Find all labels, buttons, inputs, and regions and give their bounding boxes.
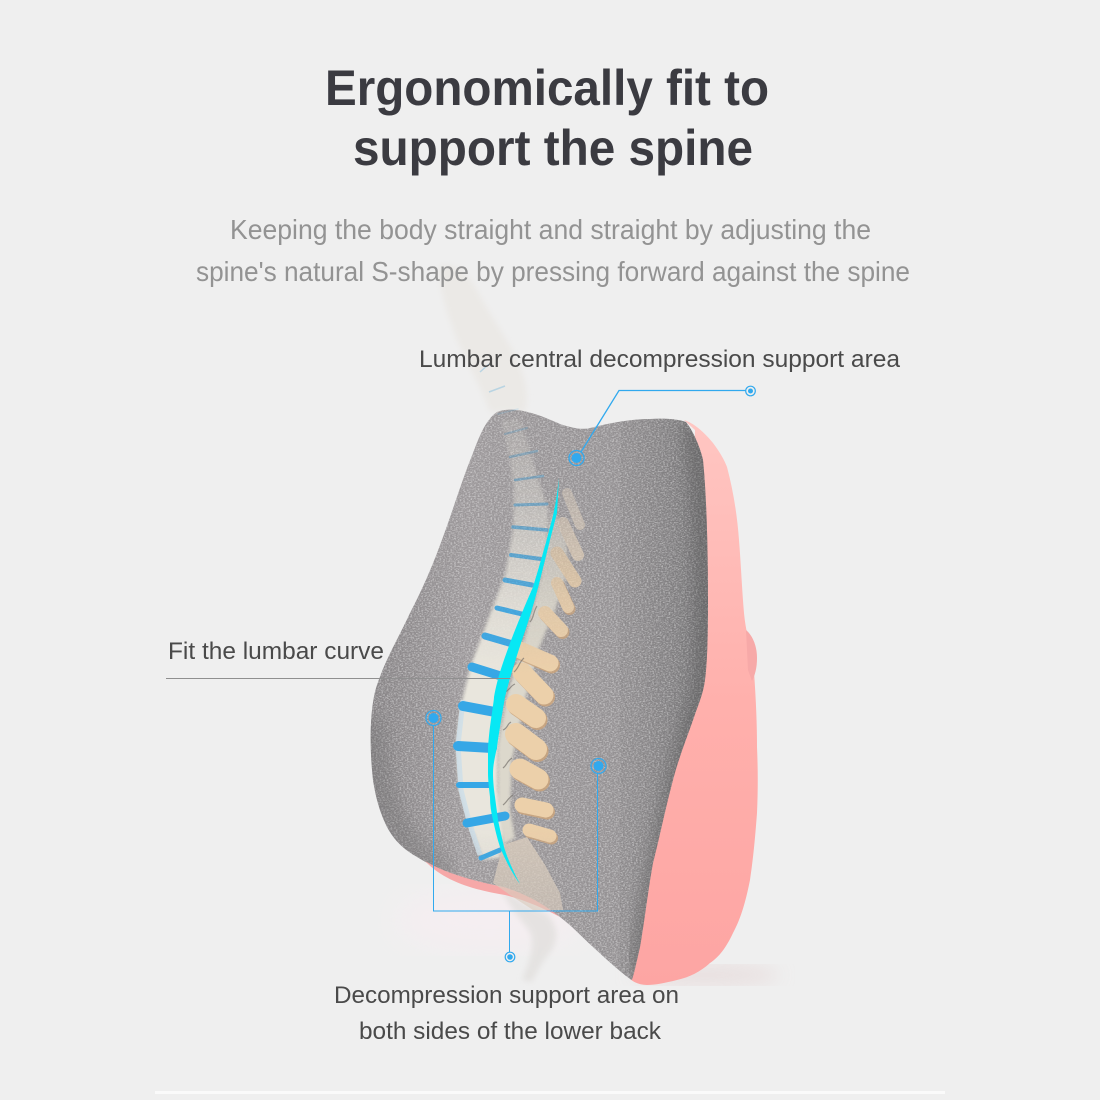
subtitle: Keeping the body straight and straight by adjusting the <box>230 214 871 245</box>
marker: right side support <box>591 758 606 774</box>
spine illustration <box>456 409 580 910</box>
marker: central support <box>569 450 584 466</box>
facet joint shadows <box>503 606 537 805</box>
vertebral bodies <box>456 418 548 860</box>
soft floor shadow <box>395 890 780 984</box>
lumbar cushion <box>360 400 758 990</box>
inner bone mass right of curve <box>498 510 568 845</box>
label: decompression support: both sides of the lower back <box>359 1018 662 1045</box>
vertebra shading <box>458 700 480 855</box>
pink edge under cushion <box>425 861 560 917</box>
cushion grey front <box>360 400 720 990</box>
spinous process shadow layer <box>518 585 570 838</box>
callout: central support connector <box>569 386 755 466</box>
callout line: fit the lumbar curve <box>166 678 510 680</box>
cyan spinal curve <box>488 478 559 884</box>
infographic canvas <box>155 68 945 1094</box>
intervertebral discs <box>458 409 547 858</box>
faint upper spine <box>439 265 527 412</box>
title <box>325 60 769 176</box>
title: support the spine <box>353 120 753 176</box>
callout: lower back connector <box>426 710 606 962</box>
label: decompression support <box>334 982 679 1045</box>
cushion pink side <box>630 420 758 985</box>
bottom rule <box>155 1091 945 1094</box>
marker: upper right end <box>746 386 755 396</box>
cushion strap knob <box>746 630 757 681</box>
sacrum <box>493 837 563 910</box>
title: Ergonomically fit to <box>325 60 769 116</box>
subtitle: spine's natural S-shape by pressing forward against the spine <box>196 256 910 287</box>
marker: left side support <box>426 710 441 726</box>
subtitle <box>196 214 910 287</box>
label: decompression support: Decompression support area on <box>334 982 679 1009</box>
label: fit the lumbar curve: Fit the lumbar curve <box>168 638 384 665</box>
label: lumbar central: Lumbar central decompression support area <box>419 346 901 373</box>
faint lower spine tail <box>500 885 556 982</box>
marker: bottom end <box>505 952 515 962</box>
spinous processes <box>516 493 580 836</box>
